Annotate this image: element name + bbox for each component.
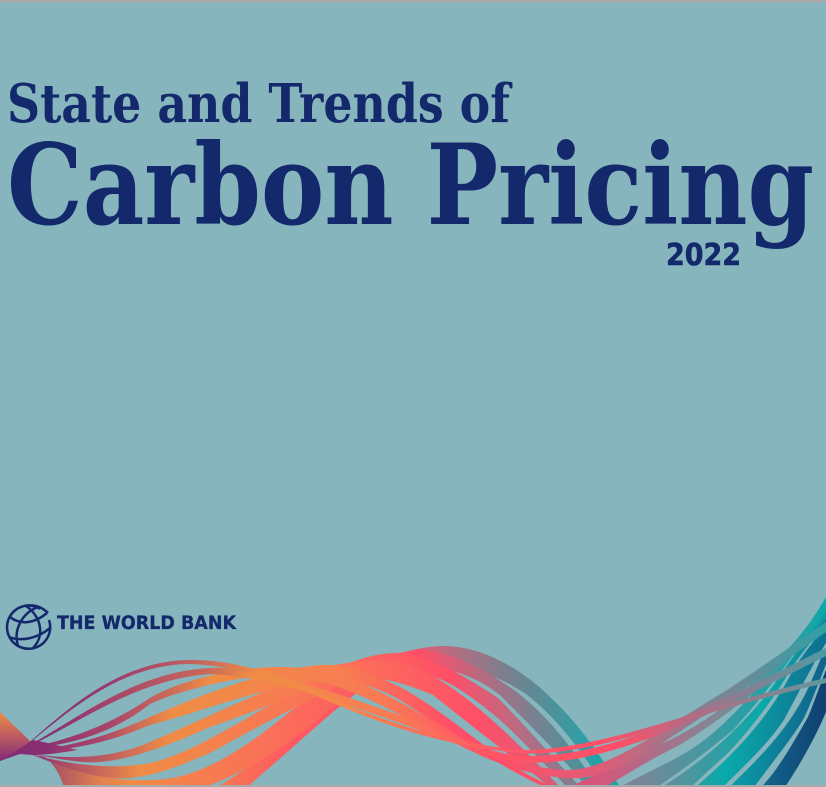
logo: The World Bank	[7, 605, 237, 649]
year: 2022: 2022	[666, 238, 741, 273]
ribbon: purple convergence mass	[0, 740, 78, 761]
ribbon: left stub	[0, 712, 32, 761]
ribbon: right band 5	[615, 608, 826, 787]
ribbons: flowing wave graphic	[0, 597, 826, 787]
bottom border	[0, 785, 826, 787]
icon: globe	[7, 605, 50, 649]
ribbon 5	[22, 661, 563, 787]
ribbon 3	[20, 622, 826, 778]
ribbon: right band 4	[656, 618, 826, 787]
ribbon 4	[22, 665, 575, 787]
ribbon: right band 2	[726, 648, 826, 787]
ribbon 6	[25, 653, 583, 787]
ribbon 1: thin top	[20, 660, 826, 754]
ribbon 4 right part	[560, 597, 826, 787]
ribbon: right band 3	[692, 625, 826, 787]
top border	[0, 0, 826, 2]
title: State and Trends of: State and Trends of	[7, 73, 513, 135]
ribbon 7	[38, 650, 600, 787]
ribbon 2	[20, 648, 826, 763]
ribbon 8: top of middle peak	[217, 646, 622, 787]
wordmark: THE WORLD BANK	[57, 612, 237, 634]
ribbon: right band 1 dark	[758, 670, 826, 787]
